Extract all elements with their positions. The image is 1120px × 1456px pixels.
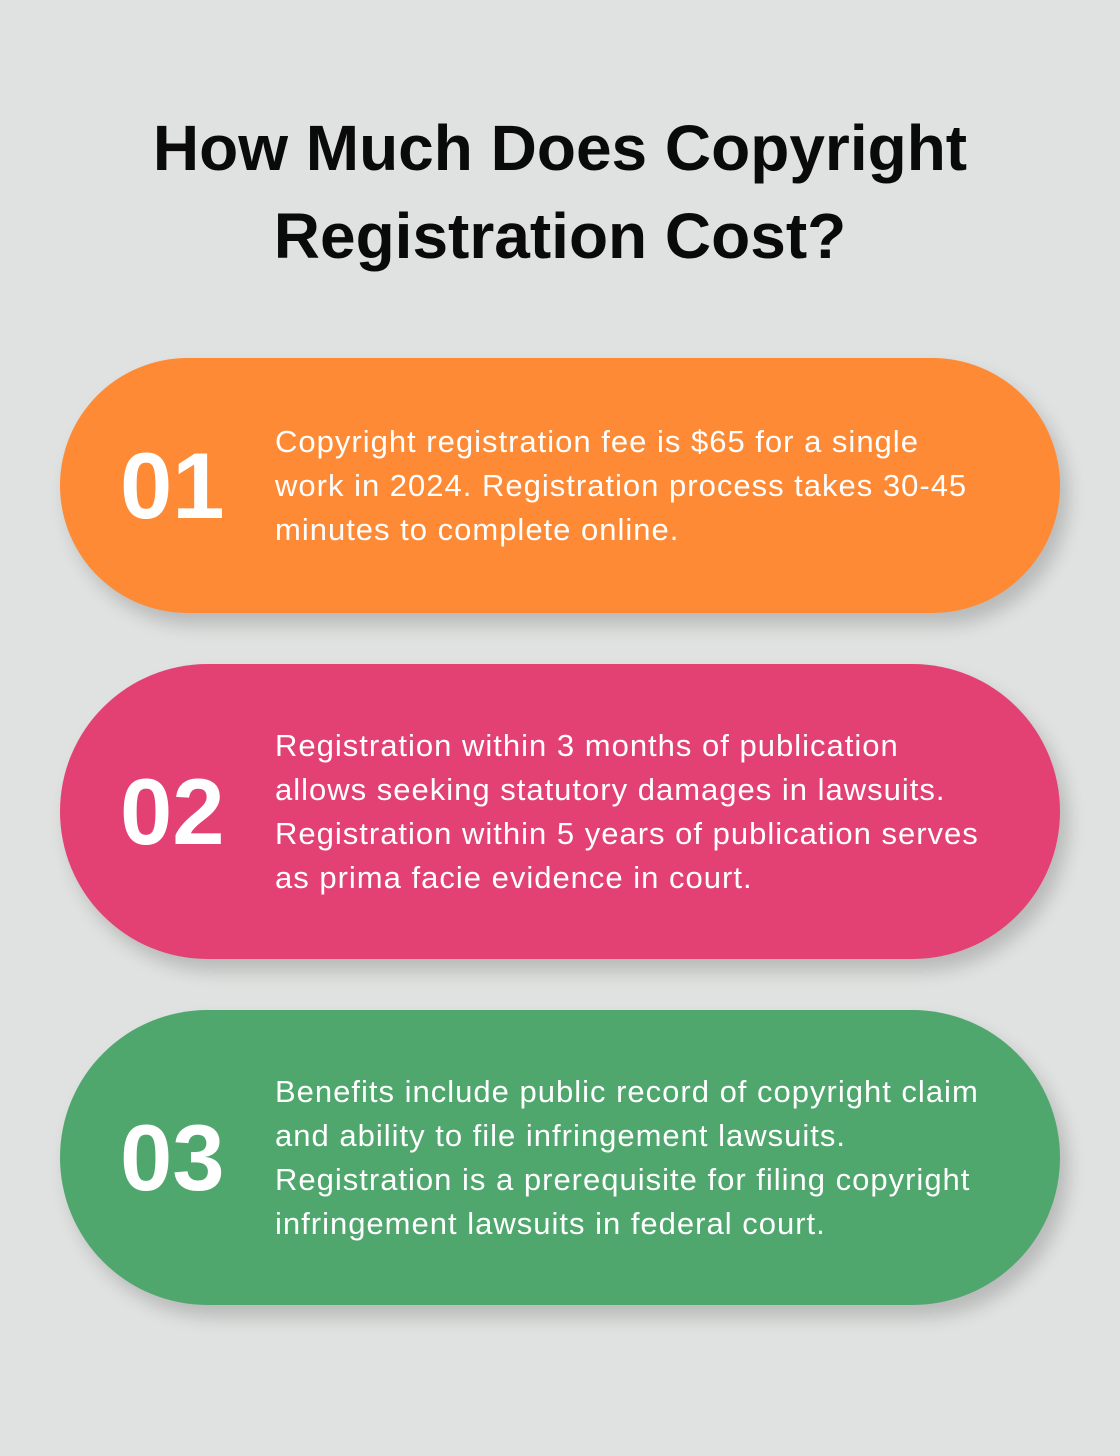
text 02: Registration within 3 months of publication <box>275 728 899 763</box>
text 01: Copyright registration fee is $65 for a single <box>275 424 919 459</box>
title: Registration Cost? <box>274 200 846 272</box>
text 01 <box>275 424 967 547</box>
panel: item 03 <box>60 1010 1060 1305</box>
text 02 <box>275 728 979 895</box>
panel: item 02 <box>60 664 1060 959</box>
text 01: work in 2024. Registration process takes 30-45 <box>275 468 967 503</box>
text 03: Registration is a prerequisite for filing copyright <box>275 1162 970 1197</box>
text 03: Benefits include public record of copyright claim <box>275 1074 979 1109</box>
title: How Much Does Copyright <box>153 112 967 184</box>
text 03: and ability to file infringement lawsuits. <box>275 1118 846 1153</box>
text 02: as prima facie evidence in court. <box>275 860 753 895</box>
text 01: minutes to complete online. <box>275 512 679 547</box>
text 02: Registration within 5 years of publication serves <box>275 816 979 851</box>
title <box>153 112 967 272</box>
number 01: 01 <box>120 433 225 538</box>
number 02: 02 <box>120 759 225 864</box>
text 03 <box>275 1074 979 1241</box>
text 02: allows seeking statutory damages in lawsuits. <box>275 772 945 807</box>
panel: item 01 <box>60 358 1060 613</box>
text 03: infringement lawsuits in federal court. <box>275 1206 826 1241</box>
number 03: 03 <box>120 1105 225 1210</box>
